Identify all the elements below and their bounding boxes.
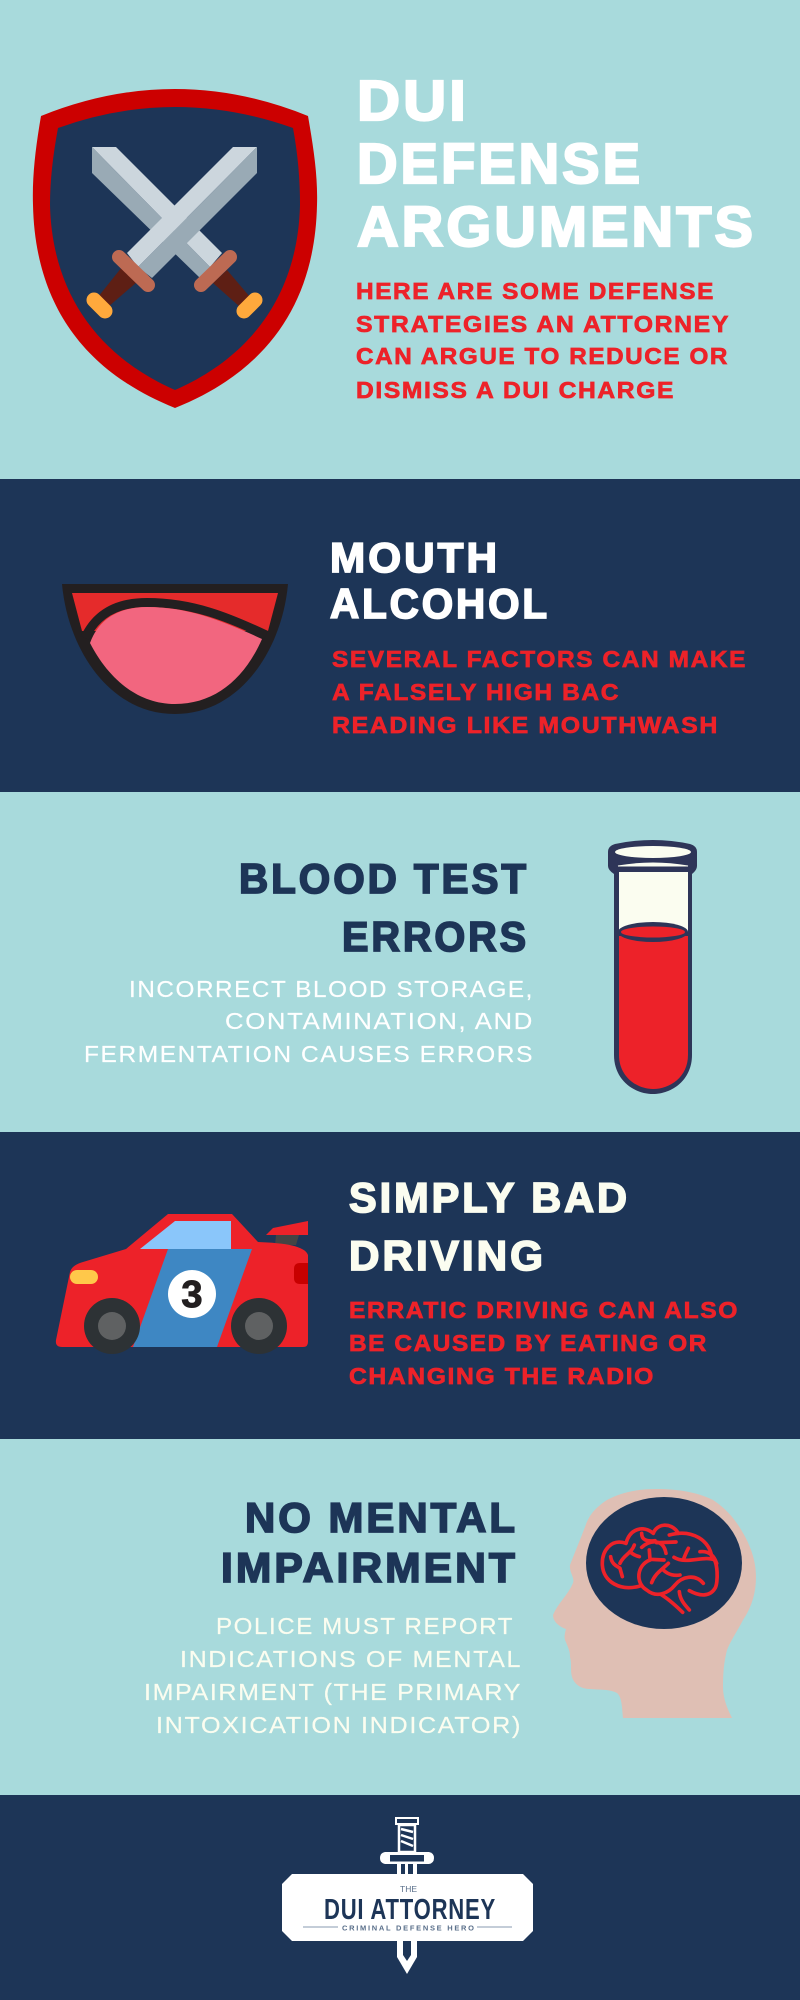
title: ARGUMENTS	[357, 195, 756, 259]
heading: mouth alcohol	[330, 534, 550, 627]
heading: simply bad driving: DRIVING	[349, 1232, 546, 1279]
text: mental impairment description: INDICATIONS OF MENTAL	[180, 1646, 522, 1672]
panel: blood test errors	[0, 792, 800, 1132]
text: blood test description	[84, 976, 534, 1067]
text: bad driving description: CHANGING THE RADIO	[349, 1363, 655, 1389]
text: bad driving description	[349, 1297, 739, 1389]
logo: the DUI attorney: CRIMINAL DEFENSE HERO	[342, 1924, 476, 1932]
text: mental impairment description: POLICE MUST REPORT	[216, 1613, 514, 1639]
heading: simply bad driving: SIMPLY BAD	[349, 1174, 630, 1221]
heading: blood test errors: BLOOD TEST	[239, 855, 529, 902]
subtitle text	[356, 278, 730, 403]
icon: mouth	[62, 584, 288, 714]
icon: race car	[56, 1214, 308, 1354]
logo: the DUI attorney: THE	[400, 1884, 419, 1894]
heading: no mental impairment: NO MENTAL	[245, 1494, 518, 1541]
icon: brain outline	[602, 1525, 717, 1612]
heading: mouth alcohol: MOUTH	[330, 534, 500, 581]
text: blood test description: INCORRECT BLOOD STORAGE,	[129, 976, 534, 1002]
icon: head with brain	[553, 1489, 756, 1718]
text: bad driving description: BE CAUSED BY EATING OR	[349, 1330, 708, 1356]
title: DEFENSE	[357, 132, 643, 196]
text: mental impairment description	[144, 1613, 522, 1738]
subtitle text: DISMISS A DUI CHARGE	[356, 377, 675, 403]
text: mouth alcohol description	[332, 646, 747, 738]
subtitle text: HERE ARE SOME DEFENSE	[356, 278, 715, 304]
title	[357, 69, 756, 259]
logo: the DUI attorney: DUI ATTORNEY	[324, 1894, 496, 1926]
text: bad driving description: ERRATIC DRIVING CAN ALSO	[349, 1297, 739, 1323]
icon: shield with crossed swords	[33, 89, 317, 408]
panel: footer	[0, 1795, 800, 2000]
text: mental impairment description: INTOXICATION INDICATOR)	[156, 1712, 522, 1738]
text: mouth alcohol description: READING LIKE MOUTHWASH	[332, 712, 719, 738]
subtitle text: CAN ARGUE TO REDUCE OR	[356, 343, 729, 369]
title: DUI	[357, 69, 469, 133]
text: blood test description: CONTAMINATION, AND	[225, 1008, 534, 1034]
logo: the DUI attorney	[282, 1818, 533, 1974]
panel: no mental impairment	[0, 1439, 800, 1795]
text: blood test description: FERMENTATION CAUSES ERRORS	[84, 1041, 534, 1067]
heading: simply bad driving	[349, 1174, 630, 1279]
heading: mouth alcohol: ALCOHOL	[330, 580, 550, 627]
heading: blood test errors	[239, 855, 529, 960]
text: mouth alcohol description: SEVERAL FACTORS CAN MAKE	[332, 646, 747, 672]
text: mouth alcohol description: A FALSELY HIGH BAC	[332, 679, 620, 705]
heading: no mental impairment: IMPAIRMENT	[221, 1544, 518, 1591]
heading: blood test errors: ERRORS	[342, 913, 529, 960]
icon: race car: 3	[181, 1274, 203, 1316]
heading: no mental impairment	[221, 1494, 518, 1591]
panel: simply bad driving	[0, 1132, 800, 1439]
panel: header	[0, 0, 800, 479]
icon: test tube	[608, 840, 697, 1094]
text: mental impairment description: IMPAIRMENT (THE PRIMARY	[144, 1679, 522, 1705]
panel: mouth alcohol	[0, 479, 800, 792]
subtitle text: STRATEGIES AN ATTORNEY	[356, 311, 730, 337]
